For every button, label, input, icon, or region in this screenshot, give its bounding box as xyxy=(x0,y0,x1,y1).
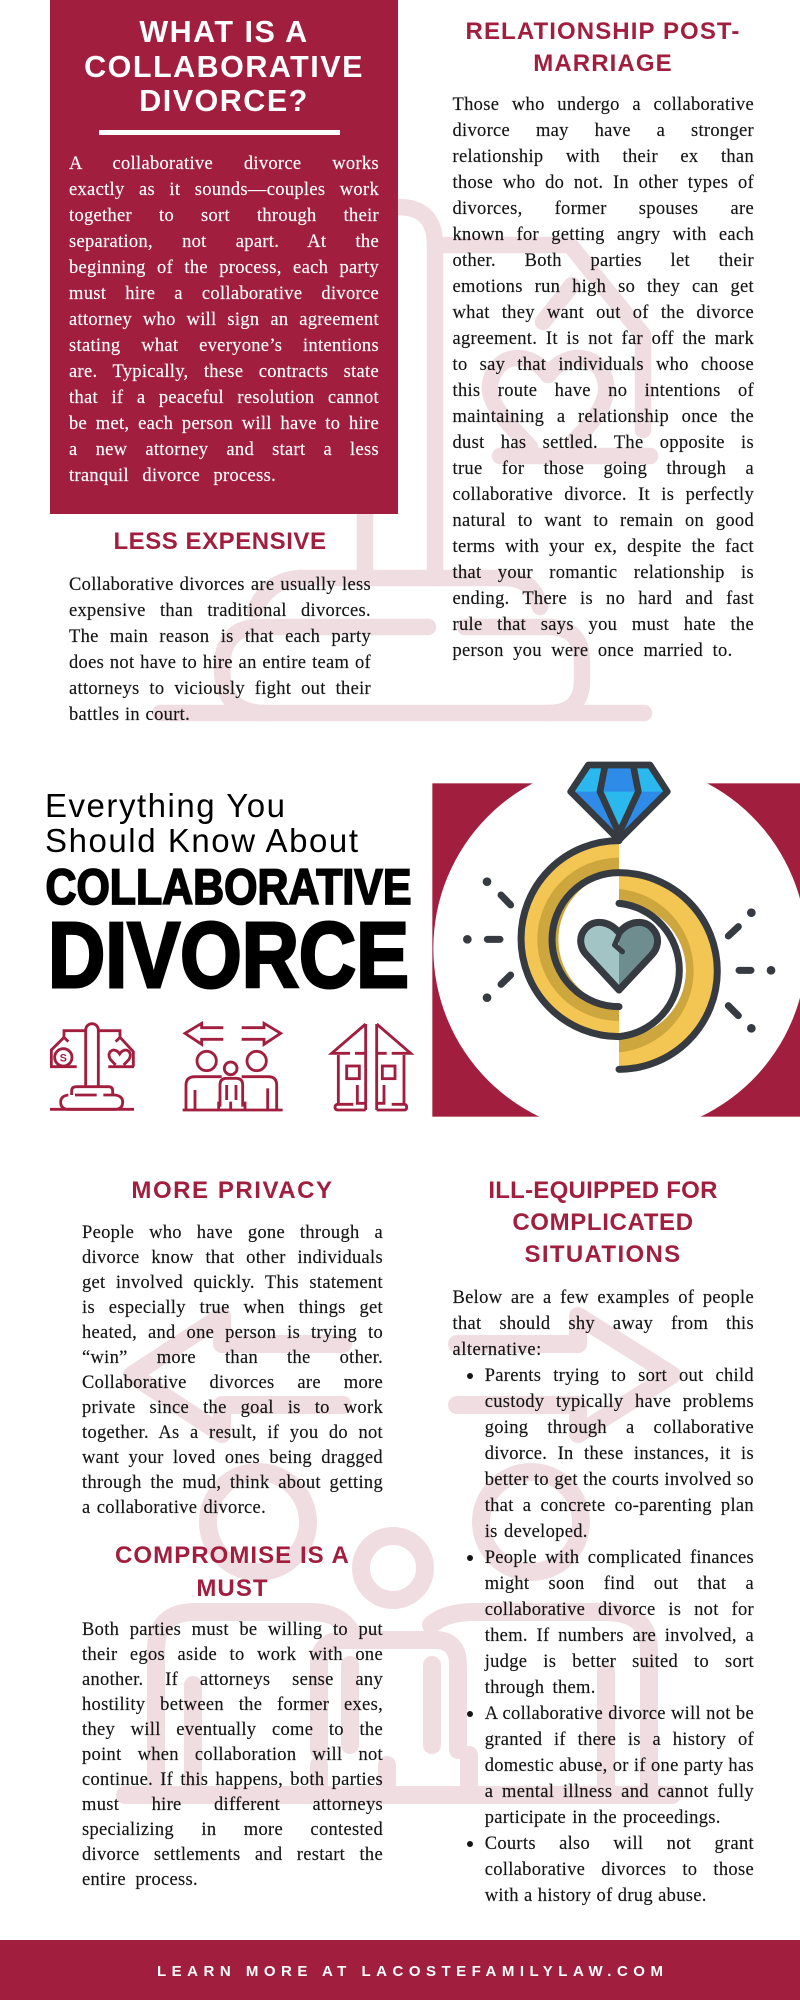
footer text: LEARN MORE AT LACOSTEFAMILYLAW.COM xyxy=(157,1963,668,1980)
bullet list: people who should avoid this alternative: that a concrete co-parenting plan xyxy=(485,1496,754,1516)
text: relationship post-marriage: ending. There is no hard and fast xyxy=(452,589,754,609)
text: relationship post-marriage: person you were once married to. xyxy=(452,641,732,661)
text: ill-equipped intro: Below are a few examples of people xyxy=(452,1288,754,1308)
heading: what is a collaborative divorce: COLLABORATIVE xyxy=(84,50,364,84)
text: more privacy: get involved quickly. This statement xyxy=(82,1273,383,1293)
heading: ill-equipped for complicated situations: COMPLICATED xyxy=(512,1209,694,1236)
text: collaborative divorce definition: that if a peaceful resolution cannot xyxy=(69,388,379,408)
text: more privacy: private since the goal is to work xyxy=(82,1398,383,1418)
text: less expensive: attorneys to viciously fight out their xyxy=(69,678,371,698)
heading: what is a collaborative divorce xyxy=(84,15,364,118)
text: compromise is a must: their egos aside to work with one xyxy=(82,1645,383,1665)
hero title: Everything You xyxy=(45,787,285,824)
text: relationship post-marriage: those who do not. In other types of xyxy=(452,173,754,193)
text: compromise is a must: point when collaboration will not xyxy=(82,1745,383,1765)
text: relationship post-marriage: divorce may have a stronger xyxy=(452,121,754,141)
bullet list: people who should avoid this alternative: might soon find out that a xyxy=(485,1574,754,1594)
text: compromise is a must: specializing in more contested xyxy=(82,1820,383,1840)
icon: scale xyxy=(50,1024,134,1109)
text: ill-equipped intro xyxy=(452,1288,754,1360)
bullet list: people who should avoid this alternative: Parents trying to sort out child xyxy=(485,1366,754,1386)
text: relationship post-marriage: maintaining a relationship once the xyxy=(452,407,754,427)
heading: what is a collaborative divorce: WHAT IS A xyxy=(139,15,309,49)
icon: separating family xyxy=(183,1023,283,1110)
sparkle rays xyxy=(467,882,771,1028)
bullet list: people who should avoid this alternative: granted if there is a history of xyxy=(485,1730,754,1750)
text: compromise is a must xyxy=(82,1620,383,1890)
icon: scale: S xyxy=(60,1052,67,1064)
divider under heading xyxy=(99,130,340,135)
text: collaborative divorce definition: a new attorney and start a less xyxy=(69,440,379,460)
text: more privacy: heated, and one person is trying to xyxy=(82,1323,383,1343)
text: relationship post-marriage xyxy=(452,95,754,661)
heading: relationship post-marriage: RELATIONSHIP POST- xyxy=(466,18,740,45)
heading: compromise is a must: MUST xyxy=(196,1574,269,1602)
bullet list: people who should avoid this alternative: judge is better suited to sort xyxy=(485,1652,754,1672)
text: relationship post-marriage: to say that individuals who choose xyxy=(452,355,754,375)
text: compromise is a must: continue. If this happens, both parties xyxy=(82,1770,383,1790)
text: ill-equipped intro: alternative: xyxy=(452,1340,542,1360)
footer banner xyxy=(0,1940,800,2000)
heading: less expensive: LESS EXPENSIVE xyxy=(113,528,327,555)
bullet list: people who should avoid this alternative: a mental illness and cannot fully xyxy=(485,1782,754,1802)
heading: relationship post-marriage: MARRIAGE xyxy=(533,50,673,76)
bullet list: people who should avoid this alternative: better to get the courts involved so xyxy=(485,1470,754,1490)
text: relationship post-marriage: natural to want to remain on good xyxy=(452,511,754,531)
panel: what is a collaborative divorce xyxy=(50,0,398,514)
diamond xyxy=(571,765,667,840)
text: collaborative divorce definition: separation, not apart. At the xyxy=(69,232,379,252)
text: relationship post-marriage: agreement. It is not far off the mark xyxy=(452,329,754,349)
red panel with white circle xyxy=(432,762,800,1135)
text: compromise is a must: divorce settlements and restart the xyxy=(82,1845,383,1865)
text: more privacy: is especially true when things get xyxy=(82,1298,383,1318)
text: relationship post-marriage: rule that says you must hate the xyxy=(452,615,754,635)
text: collaborative divorce definition: together to sort through their xyxy=(69,206,379,226)
text: collaborative divorce definition: exactly as it sounds—couples work xyxy=(69,180,379,200)
text: relationship post-marriage: what they want out of the divorce xyxy=(452,303,754,323)
text: collaborative divorce definition: stating what everyone’s intentions xyxy=(69,336,379,356)
hero title xyxy=(45,787,412,1000)
bullet list: people who should avoid this alternative: going through a collaborative xyxy=(485,1418,754,1438)
text: more privacy: together. As a result, if you do not xyxy=(82,1423,383,1443)
text: less expensive: does not have to hire an entire team of xyxy=(69,652,371,672)
text: relationship post-marriage: that your romantic relationship is xyxy=(452,563,754,583)
text: more privacy: through the mud, think about getting xyxy=(82,1473,383,1493)
text: relationship post-marriage: divorces, former spouses are xyxy=(452,199,754,219)
text: less expensive: Collaborative divorces are usually less xyxy=(69,574,371,594)
bullet list: people who should avoid this alternative: Courts also will not grant xyxy=(485,1834,754,1854)
bullet list: people who should avoid this alternative: them. If numbers are involved, a xyxy=(485,1626,754,1646)
text: more privacy: want your loved ones being dragged xyxy=(82,1448,383,1468)
text: relationship post-marriage: other. Both parties let their xyxy=(452,251,754,271)
bullet list: people who should avoid this alternative: is developed. xyxy=(485,1522,588,1542)
heading: compromise is a must xyxy=(115,1542,350,1602)
icon: split house xyxy=(332,1024,411,1110)
text: relationship post-marriage: dust has settled. The opposite is xyxy=(452,433,754,453)
bullet list: people who should avoid this alternative: participate in the proceedings. xyxy=(485,1808,721,1828)
icons row: scale, family, split house xyxy=(50,1020,414,1112)
text: relationship post-marriage: terms with your ex, despite the fact xyxy=(452,537,754,557)
text: less expensive xyxy=(68,574,371,724)
text: more privacy: a collaborative divorce. xyxy=(82,1498,266,1518)
heading: ill-equipped for complicated situations: ILL-EQUIPPED FOR xyxy=(488,1177,718,1204)
text: relationship post-marriage: true for those going through a xyxy=(452,459,754,479)
text: collaborative divorce definition: must hire a collaborative divorce xyxy=(69,284,379,304)
bullet list: people who should avoid this alternative: collaborative divorces to those xyxy=(485,1860,754,1880)
watermark: scale of justice icon xyxy=(152,198,658,722)
text: relationship post-marriage: Those who undergo a collaborative xyxy=(452,95,754,115)
ring band xyxy=(521,841,717,1069)
text: less expensive: expensive than traditional divorces. xyxy=(69,600,371,620)
text: more privacy: “win” more than the other. xyxy=(82,1348,383,1368)
bullet list: people who should avoid this alternative xyxy=(467,1366,754,1906)
text: compromise is a must: entire process. xyxy=(82,1870,198,1890)
bullet list: people who should avoid this alternative: through them. xyxy=(485,1678,596,1698)
text: compromise is a must: Both parties must be willing to put xyxy=(82,1620,383,1640)
heading: compromise is a must: COMPROMISE IS A xyxy=(115,1542,350,1569)
text: relationship post-marriage: known for getting angry with each xyxy=(452,225,754,245)
text: less expensive: battles in court. xyxy=(69,704,190,724)
bullet list: people who should avoid this alternative: domestic abuse, or if one party has xyxy=(485,1756,754,1776)
text: more privacy xyxy=(82,1223,383,1518)
broken heart xyxy=(581,922,658,990)
text: compromise is a must: they will eventually come to the xyxy=(82,1720,383,1740)
bullet list: people who should avoid this alternative: custody typically have problems xyxy=(485,1392,754,1412)
bullet list: people who should avoid this alternative: People with complicated finances xyxy=(485,1548,754,1568)
heading: ill-equipped for complicated situations xyxy=(488,1177,718,1268)
text: collaborative divorce definition xyxy=(68,154,379,486)
text: relationship post-marriage: collaborative divorce. It is perfectly xyxy=(452,485,754,505)
watermark: separated family icon xyxy=(116,1307,681,1804)
bullet list: people who should avoid this alternative: collaborative divorce is not for xyxy=(485,1600,754,1620)
text: more privacy: Collaborative divorces are more xyxy=(82,1373,383,1393)
text: compromise is a must: another. If attorneys sense any xyxy=(82,1670,383,1690)
text: less expensive: The main reason is that each party xyxy=(69,626,371,646)
bullet list: people who should avoid this alternative: A collaborative divorce will not be xyxy=(485,1704,754,1724)
bullet list: people who should avoid this alternative: with a history of drug abuse. xyxy=(485,1886,707,1906)
heading: more privacy: MORE PRIVACY xyxy=(131,1177,334,1204)
text: relationship post-marriage: relationship with their ex than xyxy=(452,147,754,167)
heading: ill-equipped for complicated situations: SITUATIONS xyxy=(524,1241,682,1268)
text: collaborative divorce definition: beginning of the process, each party xyxy=(69,258,379,278)
illustration: wedding ring with broken heart xyxy=(432,762,800,1117)
text: collaborative divorce definition: be met, each person will have to hire xyxy=(69,414,379,434)
hero title: Should Know About xyxy=(45,822,358,859)
bullet list: people who should avoid this alternative: divorce. In these instances, it is xyxy=(485,1444,754,1464)
heading: relationship post-marriage xyxy=(466,18,740,76)
text: compromise is a must: must hire different attorneys xyxy=(82,1795,383,1815)
text: more privacy: divorce know that other individuals xyxy=(82,1248,383,1268)
heading: what is a collaborative divorce: DIVORCE? xyxy=(139,84,309,118)
text: ill-equipped intro: that should shy away from this xyxy=(452,1314,754,1334)
text: compromise is a must: hostility between the former exes, xyxy=(82,1695,383,1715)
text: collaborative divorce definition: are. Typically, these contracts state xyxy=(69,362,379,382)
text: more privacy: People who have gone through a xyxy=(82,1223,383,1243)
text: collaborative divorce definition: attorney who will sign an agreement xyxy=(69,310,379,330)
text: relationship post-marriage: emotions run high so they can get xyxy=(452,277,754,297)
text: collaborative divorce definition: tranquil divorce process. xyxy=(69,466,276,486)
text: collaborative divorce definition: A collaborative divorce works xyxy=(69,154,379,174)
text: relationship post-marriage: this route have no intentions of xyxy=(452,381,754,401)
